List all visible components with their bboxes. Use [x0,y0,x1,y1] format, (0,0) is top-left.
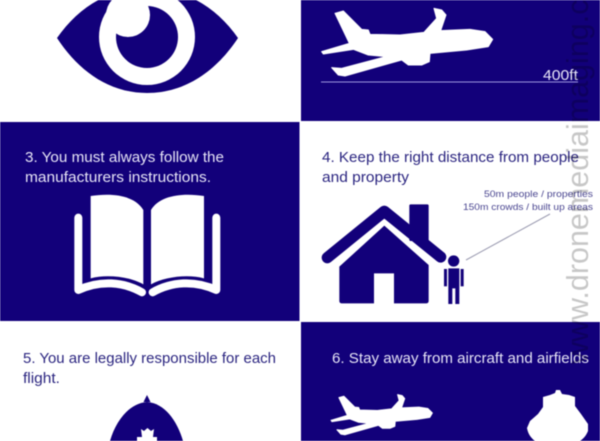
panel: height limit [301,0,600,121]
distance labels: 150m crowds / built up areas [463,202,593,213]
400ft line [321,82,578,83]
icon: person [444,255,464,304]
distance labels: 50m people / properties [484,189,593,200]
icon: small aeroplane [331,395,432,435]
icon: open book [78,195,216,292]
heading: rule 6: 6. Stay away from aircraft and airfields [332,351,589,367]
icon: house [327,204,441,303]
icon: aeroplane [322,8,493,76]
heading: rule 4: and property [322,170,410,186]
panel: rule 4 [301,122,600,321]
panel: rule 6 [301,322,600,441]
icon: eye [57,0,238,93]
heading: rule 3: 3. You must always follow the [25,150,224,166]
heading: rule 5: flight. [23,371,60,387]
icon: airfield building [527,390,588,441]
heading: rule 3: manufacturers instructions. [25,170,211,186]
panel: rule 5 [0,322,300,441]
heading: rule 5: 5. You are legally responsible for each [23,351,276,367]
400ft label: 400ft [543,67,579,84]
distance leader line [466,214,550,260]
icon: police helmet [110,395,183,441]
badge [137,428,157,441]
panel: rule 3 [0,122,300,321]
heading: rule 4: 4. Keep the right distance from people [322,150,579,166]
panel: eye [0,0,300,122]
